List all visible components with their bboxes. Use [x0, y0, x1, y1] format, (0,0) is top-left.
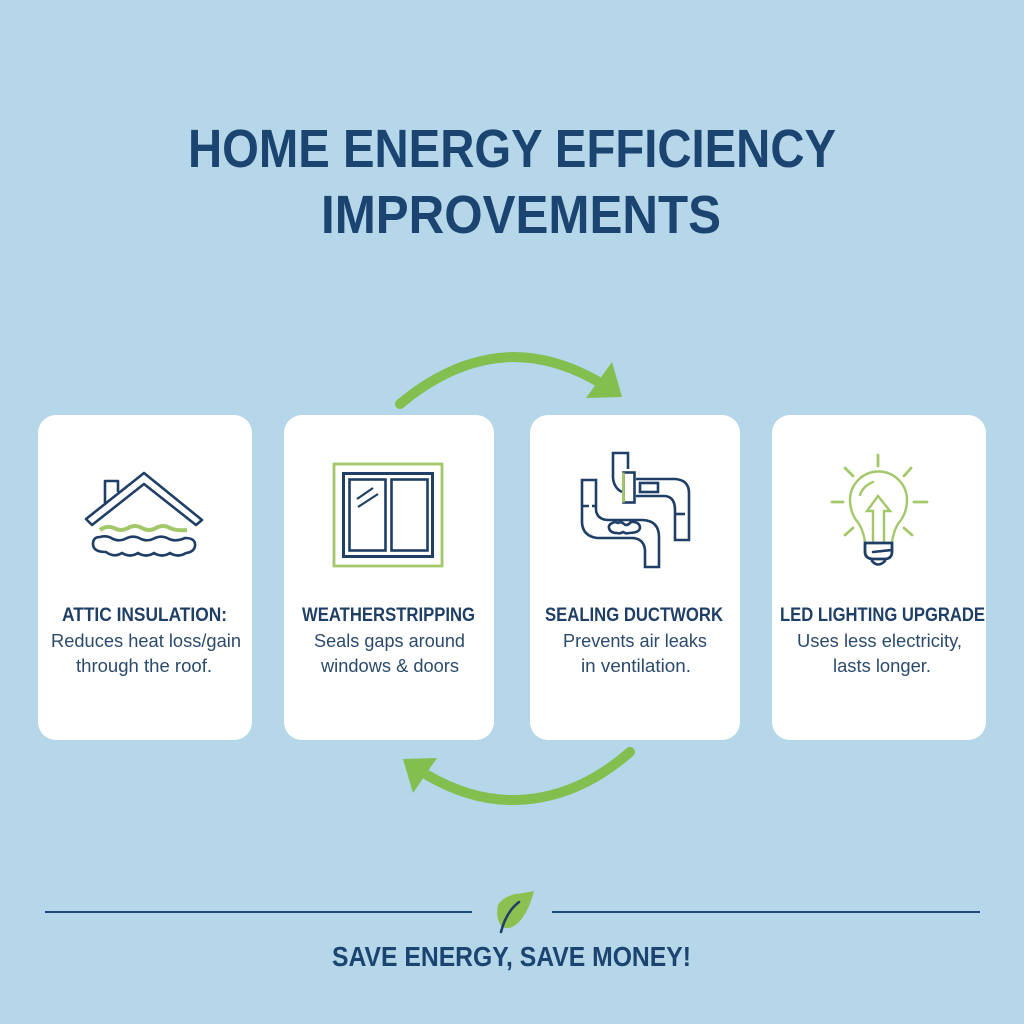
text: sealing ductwork: Prevents air leaks [563, 630, 707, 651]
text: led lighting upgrade [780, 605, 985, 676]
text: weatherstripping: windows & doors [320, 655, 459, 676]
text: weatherstripping [302, 605, 475, 676]
text: led lighting upgrade: lasts longer. [833, 655, 931, 676]
title [188, 119, 836, 245]
panel: led lighting upgrade [772, 415, 986, 740]
text: sealing ductwork: SEALING DUCTWORK [545, 605, 723, 626]
arrow: bottom curved arrow [403, 752, 630, 800]
icon: light bulb [832, 455, 927, 564]
panel: sealing ductwork [530, 415, 740, 740]
text: attic insulation: through the roof. [76, 655, 212, 676]
footer slogan: SAVE ENERGY, SAVE MONEY! [332, 941, 691, 972]
arrow: top curved arrow [400, 357, 622, 404]
text: sealing ductwork: in ventilation. [581, 655, 691, 676]
text: weatherstripping: WEATHERSTRIPPING [302, 605, 475, 626]
icon: window [334, 464, 442, 566]
title: HOME ENERGY EFFICIENCY [188, 119, 836, 179]
text: led lighting upgrade: LED LIGHTING UPGRADE [780, 605, 985, 626]
title: IMPROVEMENTS [321, 185, 721, 245]
panel: attic insulation [38, 415, 252, 740]
text: attic insulation: ATTIC INSULATION: [62, 605, 227, 626]
text: attic insulation: Reduces heat loss/gain [51, 630, 241, 651]
text: weatherstripping: Seals gaps around [314, 630, 465, 651]
text: attic insulation [51, 605, 241, 676]
icon: ducts [582, 453, 689, 567]
panel: weatherstripping [284, 415, 494, 740]
footer divider and leaf [45, 891, 980, 932]
icon: leaf [497, 891, 534, 932]
text: led lighting upgrade: Uses less electricity, [797, 630, 962, 651]
text: sealing ductwork [545, 605, 723, 676]
icon: house with insulation [86, 473, 202, 556]
